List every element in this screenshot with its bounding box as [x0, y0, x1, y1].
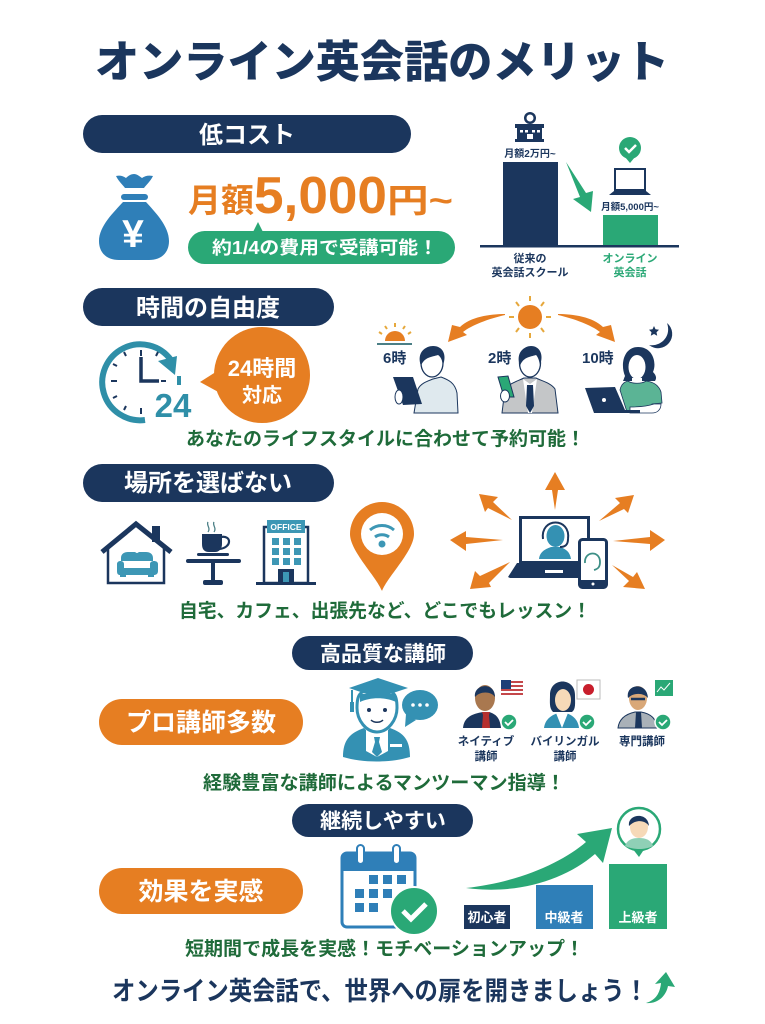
icon: wifi location pin	[350, 502, 414, 591]
bar chart: monthly cost comparison: 英会話	[614, 265, 646, 279]
panel: low cost	[83, 112, 679, 279]
bar chart: monthly cost comparison	[480, 112, 679, 279]
arrow: to night	[558, 314, 615, 342]
panel: teachers	[99, 636, 673, 794]
bar chart: monthly cost comparison: 英会話スクール	[492, 265, 568, 279]
label: bilingual teacher: 講師	[554, 749, 577, 763]
icon: learner avatar	[618, 808, 660, 857]
panel: easy to continue	[99, 804, 667, 960]
icon: sunrise	[377, 323, 412, 345]
heading: easy to continue	[292, 804, 473, 837]
panel: any location	[83, 464, 665, 622]
bar chart: monthly cost comparison: 月額5,000円~	[601, 201, 659, 213]
heading: any location: 場所を選ばない	[124, 470, 292, 497]
callout: one quarter cost	[188, 222, 455, 264]
icon: businessman with phone	[498, 346, 558, 413]
bar: intermediate: 中級者	[544, 910, 584, 925]
icon: moon and star	[649, 323, 672, 348]
icon: office building	[256, 520, 316, 585]
heading: time freedom	[83, 288, 334, 326]
label: specialist teacher: 専門講師	[619, 734, 665, 748]
icon: woman with laptop	[585, 347, 662, 413]
icon: calendar with check	[342, 845, 438, 935]
heading: low cost	[83, 115, 411, 153]
label: 6 o'clock: 6時	[383, 350, 406, 367]
title: オンライン英会話のメリット	[95, 38, 669, 87]
price	[188, 167, 453, 225]
label: native teacher: 講師	[474, 749, 498, 763]
price: 円~	[387, 182, 453, 219]
bar chart: monthly cost comparison: 月額2万円~	[504, 147, 556, 160]
caption: lifestyle: あなたのライフスタイルに合わせて予約可能！	[186, 428, 585, 450]
arrow: growth	[466, 828, 612, 890]
price: 5,000	[254, 167, 387, 225]
icon: person with tablet	[393, 346, 458, 413]
badge: many professional teachers: プロ講師多数	[126, 709, 276, 737]
heading: low cost: 低コスト	[199, 122, 295, 149]
badge: feel the results: 効果を実感	[138, 878, 264, 906]
badge: many professional teachers	[99, 699, 303, 745]
heading: time freedom: 時間の自由度	[136, 295, 280, 322]
icon: check badge	[619, 137, 641, 163]
callout: 24 hours: 24時間	[228, 356, 296, 381]
bar: advanced	[609, 864, 667, 929]
bar: intermediate	[536, 885, 593, 929]
caption: one-on-one: 経験豊富な講師によるマンツーマン指導！	[203, 772, 565, 794]
icon: money bag	[99, 174, 169, 260]
icon: school	[515, 112, 544, 142]
icon: house	[102, 524, 171, 583]
callout: 24 hours	[200, 327, 310, 423]
label: bilingual teacher: バイリンガル	[530, 734, 600, 748]
caption: motivation: 短期間で成長を実感！モチベーションアップ！	[185, 937, 584, 960]
callout: 24 hours: 対応	[242, 384, 282, 407]
caption: anywhere: 自宅、カフェ、出張先など、どこでもレッスン！	[179, 600, 591, 622]
icon: office building: OFFICE	[270, 522, 302, 532]
icon: laptop	[609, 169, 651, 195]
bar chart: monthly cost comparison: 従来の	[514, 251, 546, 265]
price: 月額	[188, 182, 254, 219]
label: native teacher	[458, 734, 515, 763]
icon: devices with video call	[508, 518, 606, 588]
icon: graduate teacher	[343, 678, 438, 762]
bar chart: monthly cost comparison: オンライン	[602, 252, 658, 265]
icon: bilingual teacher	[544, 680, 600, 730]
heading: any location	[83, 464, 334, 502]
heading: easy to continue: 継続しやすい	[320, 810, 446, 833]
label: bilingual teacher	[530, 734, 600, 763]
icon: sun	[509, 296, 551, 338]
panel: time freedom	[83, 288, 672, 450]
arrow: to morning	[448, 314, 505, 342]
closing message: オンライン英会話で、世界への扉を開きましょう！	[112, 976, 648, 1006]
bar: beginner	[464, 905, 510, 929]
arrows: radiating directions	[450, 472, 665, 589]
bar: beginner: 初心者	[467, 910, 507, 925]
arrow: closing upward	[646, 972, 675, 1003]
icon: money bag: ¥	[122, 213, 144, 256]
label: native teacher: ネイティブ	[458, 734, 515, 748]
badge: feel the results	[99, 868, 303, 914]
heading: teachers	[292, 636, 473, 670]
label: 2 o'clock: 2時	[488, 350, 511, 367]
icon: cafe table	[186, 522, 241, 585]
bar: advanced: 上級者	[618, 910, 658, 925]
callout: one quarter cost: 約1/4の費用で受講可能！	[212, 237, 438, 258]
heading: teachers: 高品質な講師	[320, 643, 446, 666]
label: 10 o'clock: 10時	[582, 350, 614, 367]
icon: clock 24	[102, 344, 192, 424]
arrow: cost reduction	[566, 162, 593, 212]
icon: clock 24: 24	[155, 387, 192, 424]
icon: specialist teacher	[618, 680, 673, 730]
icon: native teacher	[463, 680, 523, 730]
